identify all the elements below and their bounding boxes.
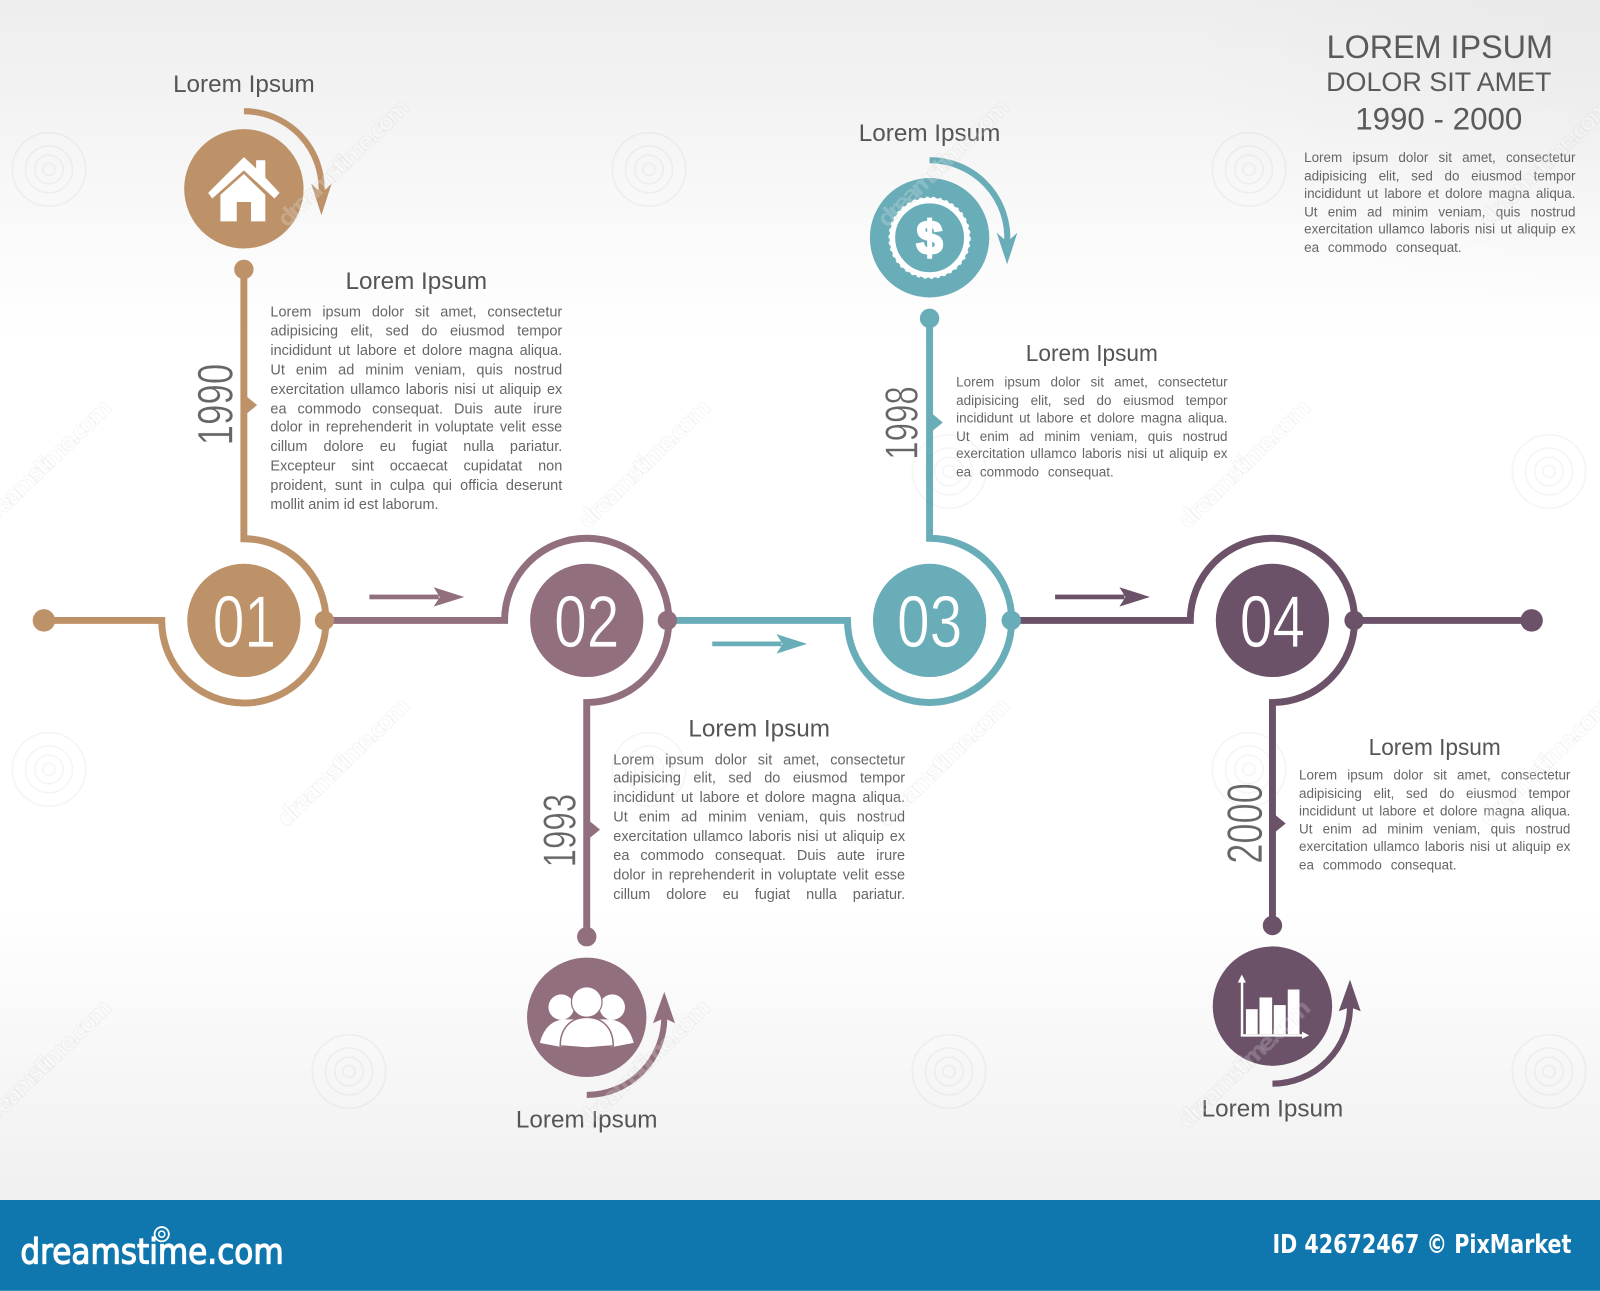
text block: 2000: adipisicing elit, sed do eiusmod tempor bbox=[1299, 785, 1570, 801]
text block: 1990: ea commodo consequat. Duis aute irure bbox=[270, 401, 562, 417]
milestone 04: plum connector and ring: 04 bbox=[1240, 580, 1305, 663]
milestone 01: brown connector and ring bbox=[33, 260, 326, 703]
text block: 1993: dolor in reprehenderit in voluptate velit esse bbox=[613, 867, 905, 884]
year 1990: 1990 bbox=[188, 364, 244, 445]
text block: 1993: adipisicing elit, sed do eiusmod tempor bbox=[613, 771, 905, 787]
watermark overlay: dreamstime.com bbox=[1172, 393, 1317, 534]
text block: 2000: exercitation ullamco laboris nisi ut aliquip ex bbox=[1299, 839, 1570, 854]
footer bar bbox=[0, 1200, 1600, 1291]
text block: intro: ea commodo consequat. bbox=[1304, 240, 1462, 255]
text block: 1993: exercitation ullamco laboris nisi ut aliquip ex bbox=[613, 829, 905, 845]
main title bbox=[1326, 29, 1553, 137]
text block: 1998: incididunt ut labore et dolore magna aliqua. bbox=[956, 410, 1228, 426]
watermark overlay: dreamstime.com bbox=[871, 691, 1016, 832]
watermark overlay: dreamstime.com bbox=[871, 92, 1016, 233]
icon: bar chart bbox=[1213, 946, 1332, 1066]
text block: 1998: adipisicing elit, sed do eiusmod tempor bbox=[956, 392, 1228, 408]
year 1993: 1993 bbox=[534, 794, 586, 867]
circular arrow: house bbox=[244, 111, 332, 215]
footer logo: dreamstime.com bbox=[20, 1232, 284, 1272]
text block: 1990 bbox=[270, 304, 562, 513]
text block: 1993: Lorem ipsum dolor sit amet, consectetur bbox=[613, 752, 905, 768]
text block: 2000: Ut enim ad minim veniam, quis nostrud bbox=[1299, 821, 1570, 837]
icon: dollar coin bbox=[870, 178, 989, 297]
text block: 2000: ea commodo consequat. bbox=[1299, 857, 1457, 872]
label: dollar icon: Lorem Ipsum bbox=[859, 120, 1000, 147]
text block: 1990: cillum dolore eu fugiat nulla pariatur. bbox=[270, 439, 562, 455]
text block: 1993: ea commodo consequat. Duis aute irure bbox=[613, 848, 905, 864]
ring junction dots bbox=[315, 611, 1364, 630]
watermark overlay: dreamstime.com bbox=[572, 393, 717, 534]
text block: intro: exercitation ullamco laboris nisi ut aliquip ex bbox=[1304, 222, 1576, 237]
text block: 1998 bbox=[956, 374, 1228, 480]
text block: intro bbox=[1304, 150, 1576, 255]
milestone 02: mauve connector and ring: 02 bbox=[554, 580, 619, 663]
watermark overlay: dreamstime.com bbox=[572, 993, 717, 1134]
label: people icon: Lorem Ipsum bbox=[516, 1107, 658, 1134]
label: 1990 paragraph heading: Lorem Ipsum bbox=[346, 268, 487, 295]
arrow: 01 to 02 bbox=[369, 587, 464, 607]
text block: 1998: Ut enim ad minim veniam, quis nostrud bbox=[956, 428, 1228, 444]
text block: 2000: incididunt ut labore et dolore magna aliqua. bbox=[1299, 803, 1570, 819]
icon: dollar coin: $ bbox=[917, 212, 943, 264]
text block: 1990: Lorem ipsum dolor sit amet, consectetur bbox=[270, 304, 562, 320]
milestone 04: plum connector and ring bbox=[1011, 538, 1543, 935]
text block: 1990: Ut enim ad minim veniam, quis nostrud bbox=[270, 362, 562, 378]
text block: 1990: Excepteur sint occaecat cupidatat non bbox=[270, 458, 562, 475]
text block: intro: Ut enim ad minim veniam, quis nostrud bbox=[1304, 204, 1576, 219]
label: 1993 paragraph heading: Lorem Ipsum bbox=[688, 716, 830, 743]
watermark overlay: dreamstime.com bbox=[1172, 993, 1317, 1134]
text block: intro: adipisicing elit, sed do eiusmod tempor bbox=[1304, 168, 1576, 183]
milestone 02: mauve connector and ring bbox=[324, 538, 669, 946]
icon: house bbox=[184, 129, 304, 248]
year 2000: 2000 bbox=[1217, 783, 1273, 864]
text block: 1998: exercitation ullamco laboris nisi ut aliquip ex bbox=[956, 446, 1228, 462]
milestone 01: brown connector and ring: 01 bbox=[213, 580, 276, 663]
circular arrow: people bbox=[587, 992, 675, 1095]
label: chart icon: Lorem Ipsum bbox=[1202, 1095, 1343, 1122]
watermark overlay: dreamstime.com bbox=[271, 92, 416, 233]
label: 1998 paragraph heading: Lorem Ipsum bbox=[1026, 340, 1158, 366]
arrow: 03 to 04 bbox=[1055, 587, 1150, 607]
label: 2000 paragraph heading: Lorem Ipsum bbox=[1369, 734, 1501, 760]
text block: 1990: adipisicing elit, sed do eiusmod tempor bbox=[270, 323, 562, 340]
circular arrow: dollar bbox=[930, 160, 1017, 264]
milestone 03: teal connector and ring bbox=[667, 309, 1012, 703]
label: house icon: Lorem Ipsum bbox=[173, 71, 315, 98]
text block: 1990: mollit anim id est laborum. bbox=[270, 497, 439, 513]
main title: LOREM IPSUM bbox=[1327, 29, 1553, 65]
text block: 1990: exercitation ullamco laboris nisi ut aliquip ex bbox=[270, 381, 562, 398]
icon: people bbox=[527, 958, 646, 1077]
text block: 2000: Lorem ipsum dolor sit amet, consectetur bbox=[1299, 767, 1570, 783]
text block: 1990: incididunt ut labore et dolore magna aliqua. bbox=[270, 343, 562, 359]
main title: DOLOR SIT AMET bbox=[1326, 67, 1551, 97]
milestone 03: teal connector and ring: 03 bbox=[897, 580, 962, 663]
text block: 1993: cillum dolore eu fugiat nulla pariatur. bbox=[613, 887, 905, 903]
text block: intro: incididunt ut labore et dolore magna aliqua. bbox=[1304, 186, 1576, 201]
main title: 1990 - 2000 bbox=[1355, 102, 1522, 137]
text block: 1993 bbox=[613, 752, 905, 903]
arrow: 02 to 03 bbox=[712, 634, 807, 654]
text block: intro: Lorem ipsum dolor sit amet, consectetur bbox=[1304, 150, 1576, 165]
text block: 1993: Ut enim ad minim veniam, quis nostrud bbox=[613, 809, 905, 826]
text block: 1993: incididunt ut labore et dolore magna aliqua. bbox=[613, 790, 905, 806]
text block: 2000 bbox=[1299, 767, 1570, 872]
text block: 1990: proident, sunt in culpa qui officia deserunt bbox=[270, 478, 562, 494]
text block: 1998: ea commodo consequat. bbox=[956, 464, 1114, 480]
year 1998: 1998 bbox=[875, 386, 927, 460]
watermark overlay: dreamstime.com bbox=[271, 691, 416, 832]
text block: 1990: dolor in reprehenderit in voluptate velit esse bbox=[270, 420, 562, 436]
circular arrow: chart bbox=[1272, 980, 1361, 1084]
text block: 1998: Lorem ipsum dolor sit amet, consectetur bbox=[956, 374, 1228, 390]
